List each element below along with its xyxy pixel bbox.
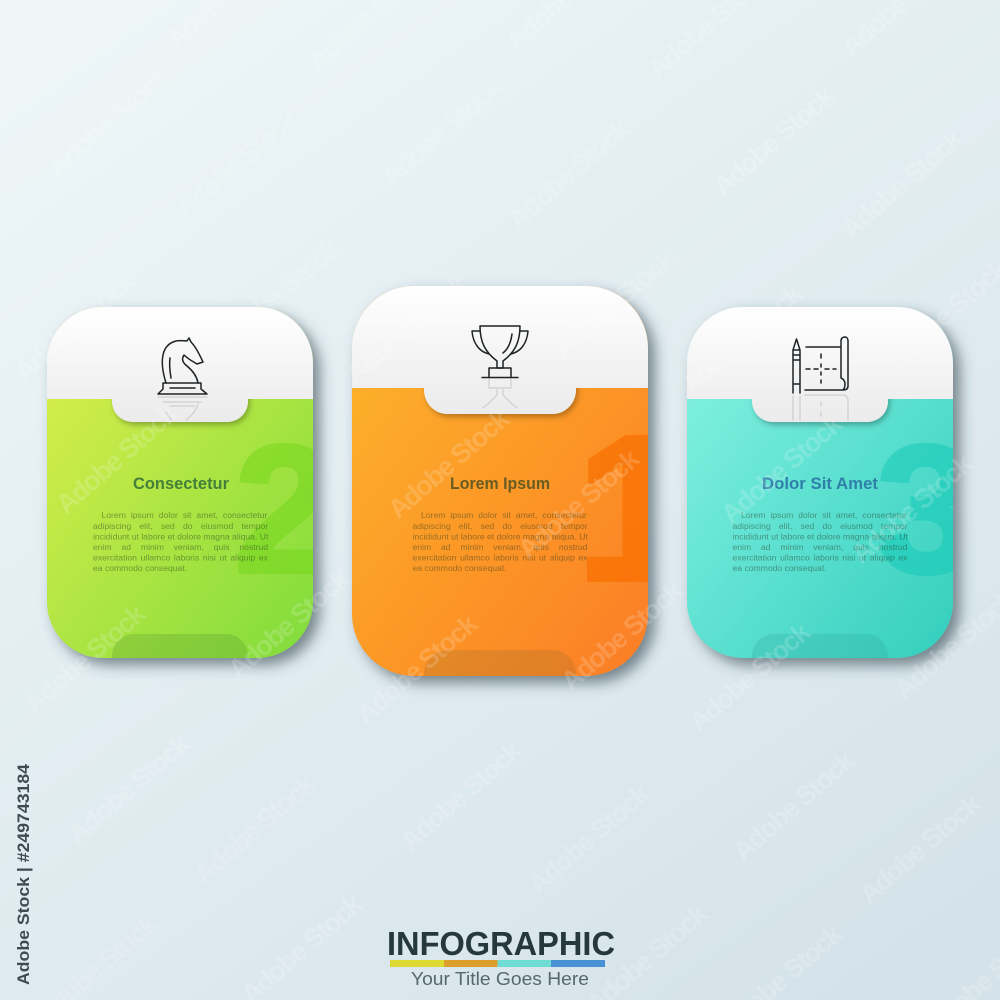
panel: card 3 Dolor Sit Amet	[687, 307, 977, 684]
icon reflection: blueprint	[793, 395, 848, 420]
body text: Lorem ipsum dolor sit amet, consectetur	[421, 510, 587, 520]
watermarks: Adobe Stock	[835, 123, 969, 245]
watermarks: Adobe Stock	[170, 103, 304, 225]
body text: adipiscing elit, sed do eiusmod tempor	[412, 521, 588, 531]
watermarks: Adobe Stock	[222, 563, 356, 685]
watermarks: Adobe Stock	[555, 575, 689, 697]
watermarks: Adobe Stock	[683, 616, 817, 738]
card body teal	[687, 307, 953, 658]
watermarks: Adobe Stock	[727, 745, 861, 867]
watermarks: Adobe Stock	[675, 278, 809, 400]
body text: Lorem ipsum dolor sit amet, consectetur	[102, 510, 267, 520]
stock id side text: Adobe Stock | #249743184	[14, 763, 33, 985]
watermarks: Adobe Stock	[50, 398, 184, 520]
watermarks: Adobe Stock	[853, 788, 987, 910]
footer title block	[387, 925, 615, 989]
body text: ea commodo consequat.	[412, 563, 507, 573]
tab shadow	[112, 392, 248, 422]
icon: blueprint and pencil	[793, 337, 848, 393]
body text: exercitation ullamco laboris nisi ut aliquip ex	[732, 552, 908, 562]
panel: card 2 Consectetur	[47, 307, 335, 684]
body text: enim ad minim veniam, quis nostrud	[93, 542, 268, 552]
watermarks: Adobe Stock	[340, 268, 474, 390]
body text: adipiscing elit, sed do eiusmod tempor	[732, 521, 908, 531]
watermarks: Adobe Stock	[375, 71, 509, 193]
big number 2: 2	[234, 407, 335, 611]
big number 1: 1	[576, 393, 692, 625]
body text: ea commodo consequat.	[93, 563, 187, 573]
watermarks: Adobe Stock	[512, 443, 646, 565]
bottom notch shade	[112, 634, 248, 658]
watermarks: Adobe Stock	[350, 608, 484, 730]
bottom notch shade	[752, 634, 888, 658]
white header with tab	[352, 286, 648, 414]
icon reflection: knight	[158, 397, 207, 420]
watermarks: Adobe Stock	[188, 768, 322, 890]
white header with tab	[687, 307, 953, 422]
heading: Consectetur	[133, 474, 229, 493]
body text: incididunt ut labore et dolore magna aliqua. Ut	[412, 532, 588, 542]
panel: card 1 Lorem Ipsum	[352, 286, 692, 700]
body text	[93, 510, 269, 573]
card body green	[47, 307, 313, 658]
watermarks: Adobe Stock	[212, 233, 346, 355]
body text	[732, 510, 908, 573]
body text: exercitation ullamco laboris nisi ut aliquip ex	[412, 552, 588, 562]
watermarks: Adobe Stock	[522, 778, 656, 900]
watermarks: Adobe Stock	[18, 598, 152, 720]
tab shadow	[752, 392, 888, 422]
watermarks: Adobe Stock	[502, 113, 636, 235]
heading: Lorem Ipsum	[450, 474, 550, 493]
watermarks: Adobe Stock	[715, 408, 849, 530]
body text: enim ad minim veniam, quis nostrud	[412, 542, 588, 552]
title: INFOGRAPHIC	[387, 925, 615, 962]
big number 3: 3	[876, 407, 977, 611]
icon reflection: trophy	[483, 379, 517, 408]
body text	[412, 510, 588, 573]
colour bar	[390, 960, 605, 967]
watermarks: Adobe Stock	[382, 403, 516, 525]
card body orange	[352, 286, 648, 676]
tab shadow	[424, 381, 576, 414]
body text: incididunt ut labore et dolore magna aliqua. Ut	[93, 532, 269, 542]
body text: ea commodo consequat.	[732, 563, 827, 573]
white header with tab	[47, 307, 313, 422]
watermarks: Adobe Stock	[707, 80, 841, 202]
body text: incididunt ut labore et dolore magna aliqua. Ut	[732, 532, 908, 542]
watermarks: Adobe Stock	[394, 735, 528, 857]
heading: Dolor Sit Amet	[762, 474, 878, 493]
subtitle: Your Title Goes Here	[411, 969, 589, 989]
watermarks: Adobe Stock	[62, 728, 196, 850]
watermarks: Adobe Stock	[845, 448, 979, 570]
body text: adipiscing elit, sed do eiusmod tempor	[93, 521, 268, 531]
bottom notch shade	[424, 650, 576, 676]
watermarks: Adobe Stock	[8, 265, 142, 387]
body text: enim ad minim veniam, quis nostrud	[732, 542, 908, 552]
icon: chess knight	[158, 338, 207, 394]
body text: Lorem ipsum dolor sit amet, consectetur	[741, 510, 907, 520]
watermarks: Adobe Stock	[42, 61, 176, 183]
body text: exercitation ullamco laboris nisi ut aliquip ex	[93, 552, 269, 562]
watermarks: Adobe Stock	[547, 243, 681, 365]
icon: trophy	[472, 326, 528, 378]
